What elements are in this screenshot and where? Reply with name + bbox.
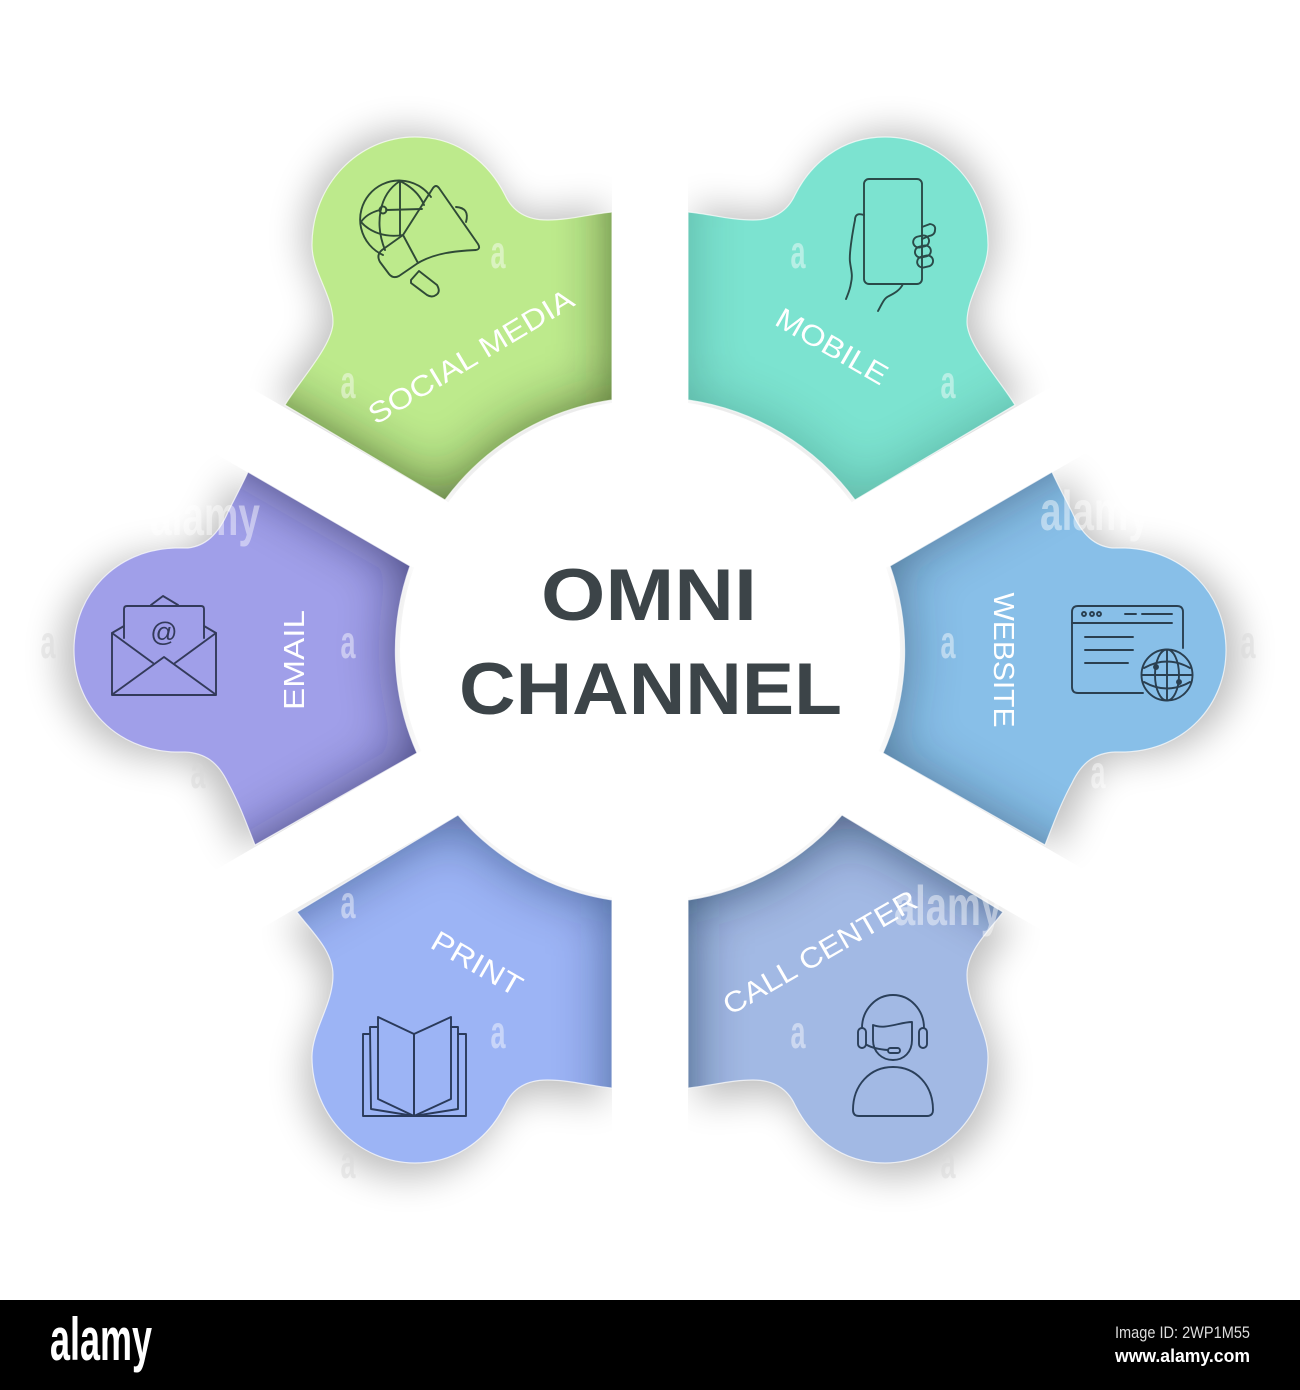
icon: globe and megaphone xyxy=(360,180,479,296)
watermark on background: a xyxy=(940,1136,956,1188)
label: call center: CALL CENTER xyxy=(718,885,923,1022)
watermark: website xyxy=(940,479,1150,798)
icon: open book xyxy=(363,1017,466,1116)
watermark: mobile: a xyxy=(790,226,806,278)
watermark: social media xyxy=(340,226,506,408)
watermark: website: a xyxy=(1090,746,1106,798)
label: social media: SOCIAL MEDIA xyxy=(363,283,581,431)
panel: website xyxy=(883,472,1226,846)
title: OMNI xyxy=(541,555,757,636)
watermark on background: a xyxy=(40,616,56,668)
watermark: mobile: a xyxy=(940,356,956,408)
watermark: website: a xyxy=(940,616,956,668)
icon: open envelope xyxy=(112,596,216,695)
footer site url: www.alamy.com xyxy=(1114,1346,1250,1366)
footer bar xyxy=(0,1300,1300,1390)
watermark on background xyxy=(40,616,1256,1188)
icon: hand holding phone xyxy=(846,179,935,311)
footer logo: alamy xyxy=(50,1306,152,1373)
watermark: website: alamy xyxy=(1040,479,1150,542)
icon: browser window with globe xyxy=(1072,606,1192,700)
icon: headset operator xyxy=(853,995,933,1116)
title: CHANNEL xyxy=(459,649,842,730)
watermark: email: alamy xyxy=(150,484,260,547)
footer image id: Image ID: 2WP1M55 xyxy=(1115,1323,1250,1342)
watermark: call center xyxy=(790,874,1002,1058)
watermark: print: a xyxy=(490,1006,506,1058)
icon: open envelope: @ xyxy=(150,617,178,647)
watermark: social media: a xyxy=(490,226,506,278)
watermark on background: a xyxy=(340,1136,356,1188)
white spokes between petals xyxy=(150,100,1150,1200)
watermark: social media: a xyxy=(340,356,356,408)
watermark on background: a xyxy=(1240,616,1256,668)
watermark: print: a xyxy=(340,876,356,928)
watermark: mobile xyxy=(790,226,956,408)
panel: email xyxy=(74,472,417,846)
label: website: WEBSITE xyxy=(987,592,1019,728)
label: email: EMAIL xyxy=(279,610,311,710)
watermark: email xyxy=(150,484,356,668)
panel: mobile xyxy=(688,136,1016,500)
label: mobile: MOBILE xyxy=(770,302,893,392)
title xyxy=(459,555,842,730)
panel: call center xyxy=(688,815,1004,1164)
center circle xyxy=(400,400,900,900)
panel: social media xyxy=(284,136,612,500)
watermark on background: a xyxy=(190,746,206,798)
watermark: email: a xyxy=(340,616,356,668)
watermark: call center: alamy xyxy=(894,874,1002,937)
panel: print xyxy=(296,815,612,1164)
watermark: call center: a xyxy=(790,1006,806,1058)
watermark: print xyxy=(340,876,506,1058)
label: print: PRINT xyxy=(425,925,528,1003)
outer soft shadows of petals xyxy=(60,131,1240,1177)
